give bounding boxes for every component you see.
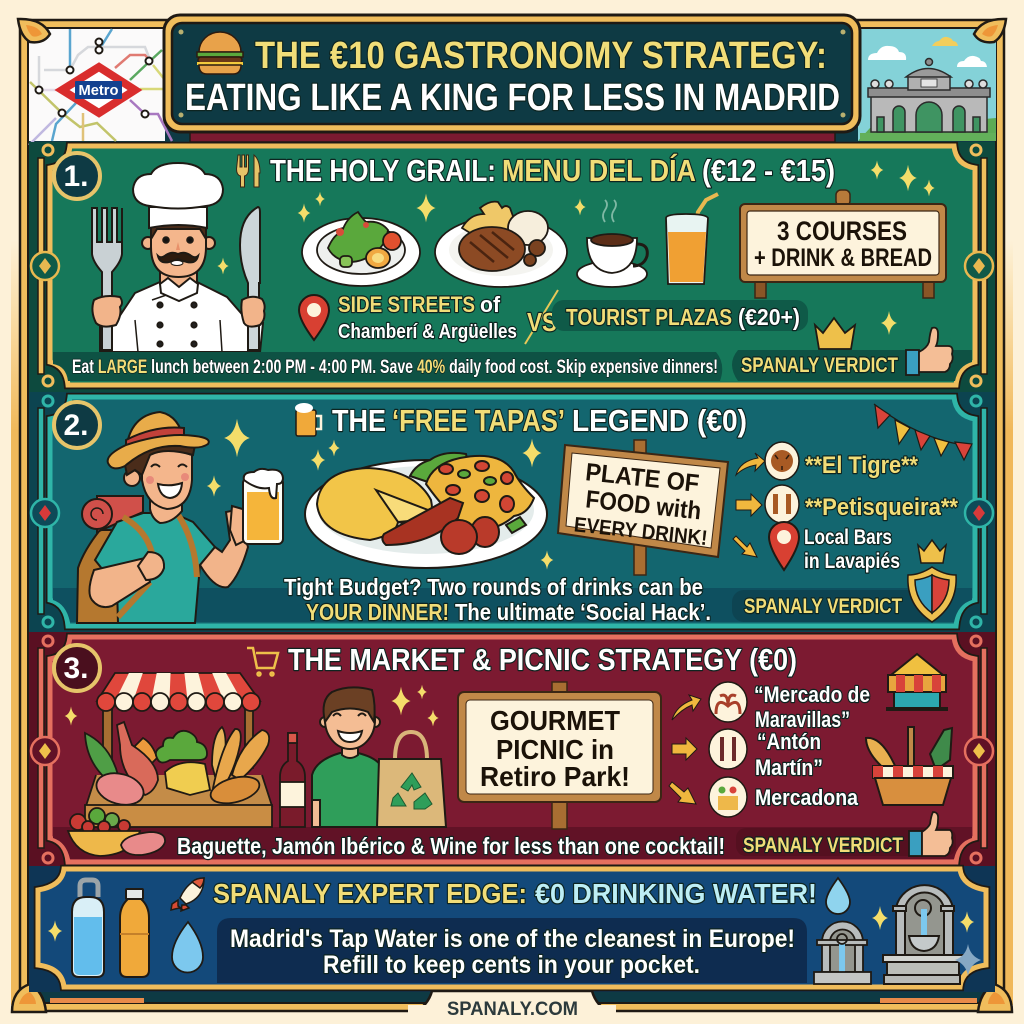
icon: shield — [908, 567, 956, 622]
label: lavapies: in Lavapiés — [804, 550, 900, 573]
arrow — [669, 782, 696, 804]
wooden sign: 3 courses: + DRINK & BREAD — [754, 244, 932, 272]
wooden sign: plate of food: FOOD with — [584, 485, 703, 525]
icon: recycle — [391, 773, 432, 809]
heading: THE HOLY GRAIL: — [270, 153, 496, 188]
metro logo — [62, 67, 135, 113]
wooden sign: 3 courses: 3 COURSES — [777, 216, 907, 246]
icon: cutlery — [765, 485, 799, 523]
hands — [92, 296, 122, 327]
icon: pin — [769, 522, 799, 570]
sparkles — [217, 160, 935, 335]
advice bar: Eat LARGE lunch between 2:00 PM - 4:00 PM. Save 40% daily food cost. Skip expensive dinners! — [72, 356, 718, 378]
label: mercado de maravillas: “Mercado de — [754, 682, 870, 707]
backpack — [77, 530, 120, 623]
side streets text: SIDE STREETS — [338, 292, 475, 317]
sparkles — [65, 685, 439, 726]
icon: groceries — [709, 777, 747, 817]
beer mug — [243, 469, 283, 544]
number badge: 2. — [63, 409, 89, 442]
tapas bar list — [733, 442, 959, 573]
small fountain — [814, 921, 871, 984]
wooden sign: gourmet picnic: PICNIC in — [496, 734, 614, 765]
baguettes — [212, 727, 226, 780]
side ornaments — [31, 737, 993, 765]
juice glass — [666, 194, 718, 284]
label: mercado de maravillas — [754, 682, 870, 732]
wooden sign: plate of food: PLATE OF — [584, 458, 700, 498]
arrow — [736, 494, 762, 516]
coat — [100, 282, 263, 352]
tote bag — [377, 732, 446, 827]
side streets text: Chamberí & Argüelles — [338, 321, 517, 343]
awning — [97, 673, 260, 711]
title text — [185, 35, 840, 119]
wine bottle — [280, 733, 305, 827]
heading: SPANALY EXPERT EDGE: — [213, 878, 527, 909]
verdict badge: SPANALY VERDICT — [744, 595, 902, 618]
icon: crown — [918, 540, 946, 563]
arrow — [672, 738, 697, 760]
icon: large water drop — [172, 922, 203, 972]
side streets text — [338, 292, 517, 343]
versus mark — [525, 290, 558, 344]
heading: THE MARKET & PICNIC STRATEGY (€0) — [288, 642, 797, 677]
head — [142, 237, 154, 249]
crate — [85, 805, 272, 827]
title plaque — [164, 15, 860, 142]
clouds — [868, 37, 987, 67]
side streets text: of — [480, 292, 501, 317]
backpacker illustration — [77, 412, 248, 623]
sparkles — [207, 419, 553, 570]
tourist plazas pill — [552, 300, 808, 331]
sparkles — [48, 906, 974, 942]
lettuce — [156, 731, 207, 763]
icon: crown — [815, 318, 855, 349]
wooden sign: gourmet picnic: GOURMET — [490, 705, 620, 736]
corner curls — [43, 396, 981, 627]
bed roll — [97, 496, 143, 532]
wooden sign: gourmet picnic: Retiro Park! — [480, 761, 630, 792]
metro logo: Metro — [78, 82, 118, 99]
market list — [669, 682, 870, 817]
number badge: 3. — [63, 652, 89, 685]
label: petisqueira: **Petisqueira** — [805, 494, 959, 521]
head — [150, 495, 182, 523]
verdict badge: SPANALY VERDICT — [743, 834, 903, 857]
pale corner sparkle — [955, 944, 981, 976]
arrow — [733, 536, 757, 557]
advice bar — [53, 352, 722, 381]
heading: €0 DRINKING WATER! — [535, 878, 817, 909]
title text: EATING LIKE A KING FOR LESS IN MADRID — [185, 77, 840, 119]
plate: steak — [435, 202, 567, 287]
juice bottle — [120, 889, 149, 977]
number badge — [54, 645, 100, 691]
label: el tigre: **El Tigre** — [805, 452, 919, 479]
bunting — [874, 404, 972, 460]
heading — [213, 878, 817, 909]
cheese — [165, 762, 210, 795]
verdict badge — [732, 567, 956, 622]
icon: burger — [197, 32, 243, 74]
verdict badge: SPANALY VERDICT — [741, 354, 898, 377]
arms — [89, 558, 150, 607]
corner curls — [43, 145, 981, 386]
tap water message: Refill to keep cents in your pocket. — [323, 951, 700, 979]
icon: thumbs up — [906, 328, 953, 375]
water bottle — [72, 880, 104, 977]
heading — [332, 403, 747, 438]
hat — [126, 412, 184, 450]
label: lavapies: Local Bars — [804, 526, 892, 549]
verdict badge — [732, 328, 972, 381]
stall posts — [86, 708, 272, 806]
shopper — [312, 687, 382, 827]
label: lavapies — [804, 526, 900, 573]
panel 3: market and picnic — [29, 632, 995, 868]
icon: beer mug — [295, 403, 321, 436]
arrow — [672, 695, 701, 720]
tapas plate — [305, 453, 547, 568]
versus mark: VS — [527, 307, 557, 337]
metro map panel — [29, 29, 172, 145]
heading: ‘FREE TAPAS’ — [392, 403, 565, 438]
icon: tiger — [765, 442, 799, 480]
shirt — [95, 513, 215, 623]
corner curls — [43, 636, 981, 863]
heading: (€12 - €15) — [702, 153, 835, 188]
tip text: YOUR DINNER! — [306, 599, 449, 625]
ham — [117, 722, 158, 795]
icon: fork and knife — [236, 155, 260, 187]
icon: rocket — [171, 878, 204, 911]
vegetables — [85, 733, 118, 778]
icon: shopping cart — [247, 648, 278, 676]
icon: picnic basket — [866, 727, 953, 805]
panel 2: free tapas — [29, 392, 995, 632]
side ornaments — [31, 499, 993, 527]
label: anton martin: “Antón — [757, 729, 821, 754]
label: anton martin — [755, 729, 823, 780]
market stall — [85, 673, 272, 827]
wooden sign: gourmet picnic — [458, 682, 661, 829]
site name: SPANALY.COM — [447, 999, 578, 1020]
fruit bowl and ham — [68, 808, 165, 856]
tip text: The ultimate ‘Social Hack’. — [455, 599, 711, 625]
panel 4: expert edge — [29, 866, 995, 992]
verdict badge — [736, 812, 956, 857]
heading — [270, 153, 835, 188]
straps — [118, 513, 197, 617]
coffee cup — [577, 200, 647, 287]
chef illustration — [92, 163, 265, 352]
heading: MENU DEL DÍA — [502, 153, 696, 188]
hat — [149, 207, 207, 228]
label: anton martin: Martín” — [755, 755, 823, 780]
icon: water drop — [826, 878, 850, 914]
tip text: Baguette, Jamón Ibérico & Wine for less than one cocktail! — [177, 833, 725, 859]
heading: LEGEND (€0) — [572, 403, 747, 438]
tap water message — [217, 918, 807, 983]
label: mercadona: Mercadona — [755, 785, 859, 810]
wooden sign: plate of food — [558, 440, 728, 575]
fork — [92, 208, 122, 350]
side ornaments — [31, 252, 993, 280]
large fountain — [883, 885, 964, 984]
plate: salad — [302, 212, 420, 286]
knife — [240, 207, 260, 350]
wooden sign: 3 courses — [740, 190, 946, 298]
label: mercado de maravillas: Maravillas” — [755, 707, 850, 732]
icon: thumbs up — [909, 812, 953, 856]
wooden sign: plate of food: EVERY DRINK! — [573, 513, 709, 550]
tourist plazas pill: TOURIST PLAZAS — [566, 304, 732, 330]
tourist plazas pill: (€20+) — [738, 304, 800, 330]
heading: THE — [332, 403, 386, 438]
icon: mercado — [709, 682, 747, 722]
icon: market building — [887, 654, 947, 710]
panel 1: menu del dia — [29, 142, 995, 392]
number badge — [54, 153, 100, 199]
title text: THE €10 GASTRONOMY STRATEGY: — [255, 35, 827, 77]
puerta de alcala scene — [858, 29, 996, 141]
tap water message: Madrid's Tap Water is one of the cleanest in Europe! — [230, 925, 795, 953]
footer band — [50, 991, 977, 1020]
arrow — [736, 453, 765, 475]
tip text: Tight Budget? Two rounds of drinks can be — [284, 574, 703, 600]
tip text — [284, 574, 711, 625]
gate — [868, 58, 990, 132]
number badge — [54, 402, 100, 448]
icon: cutlery — [709, 729, 747, 769]
icon: map pin — [299, 295, 329, 340]
face — [151, 464, 187, 467]
number badge: 1. — [63, 160, 89, 193]
